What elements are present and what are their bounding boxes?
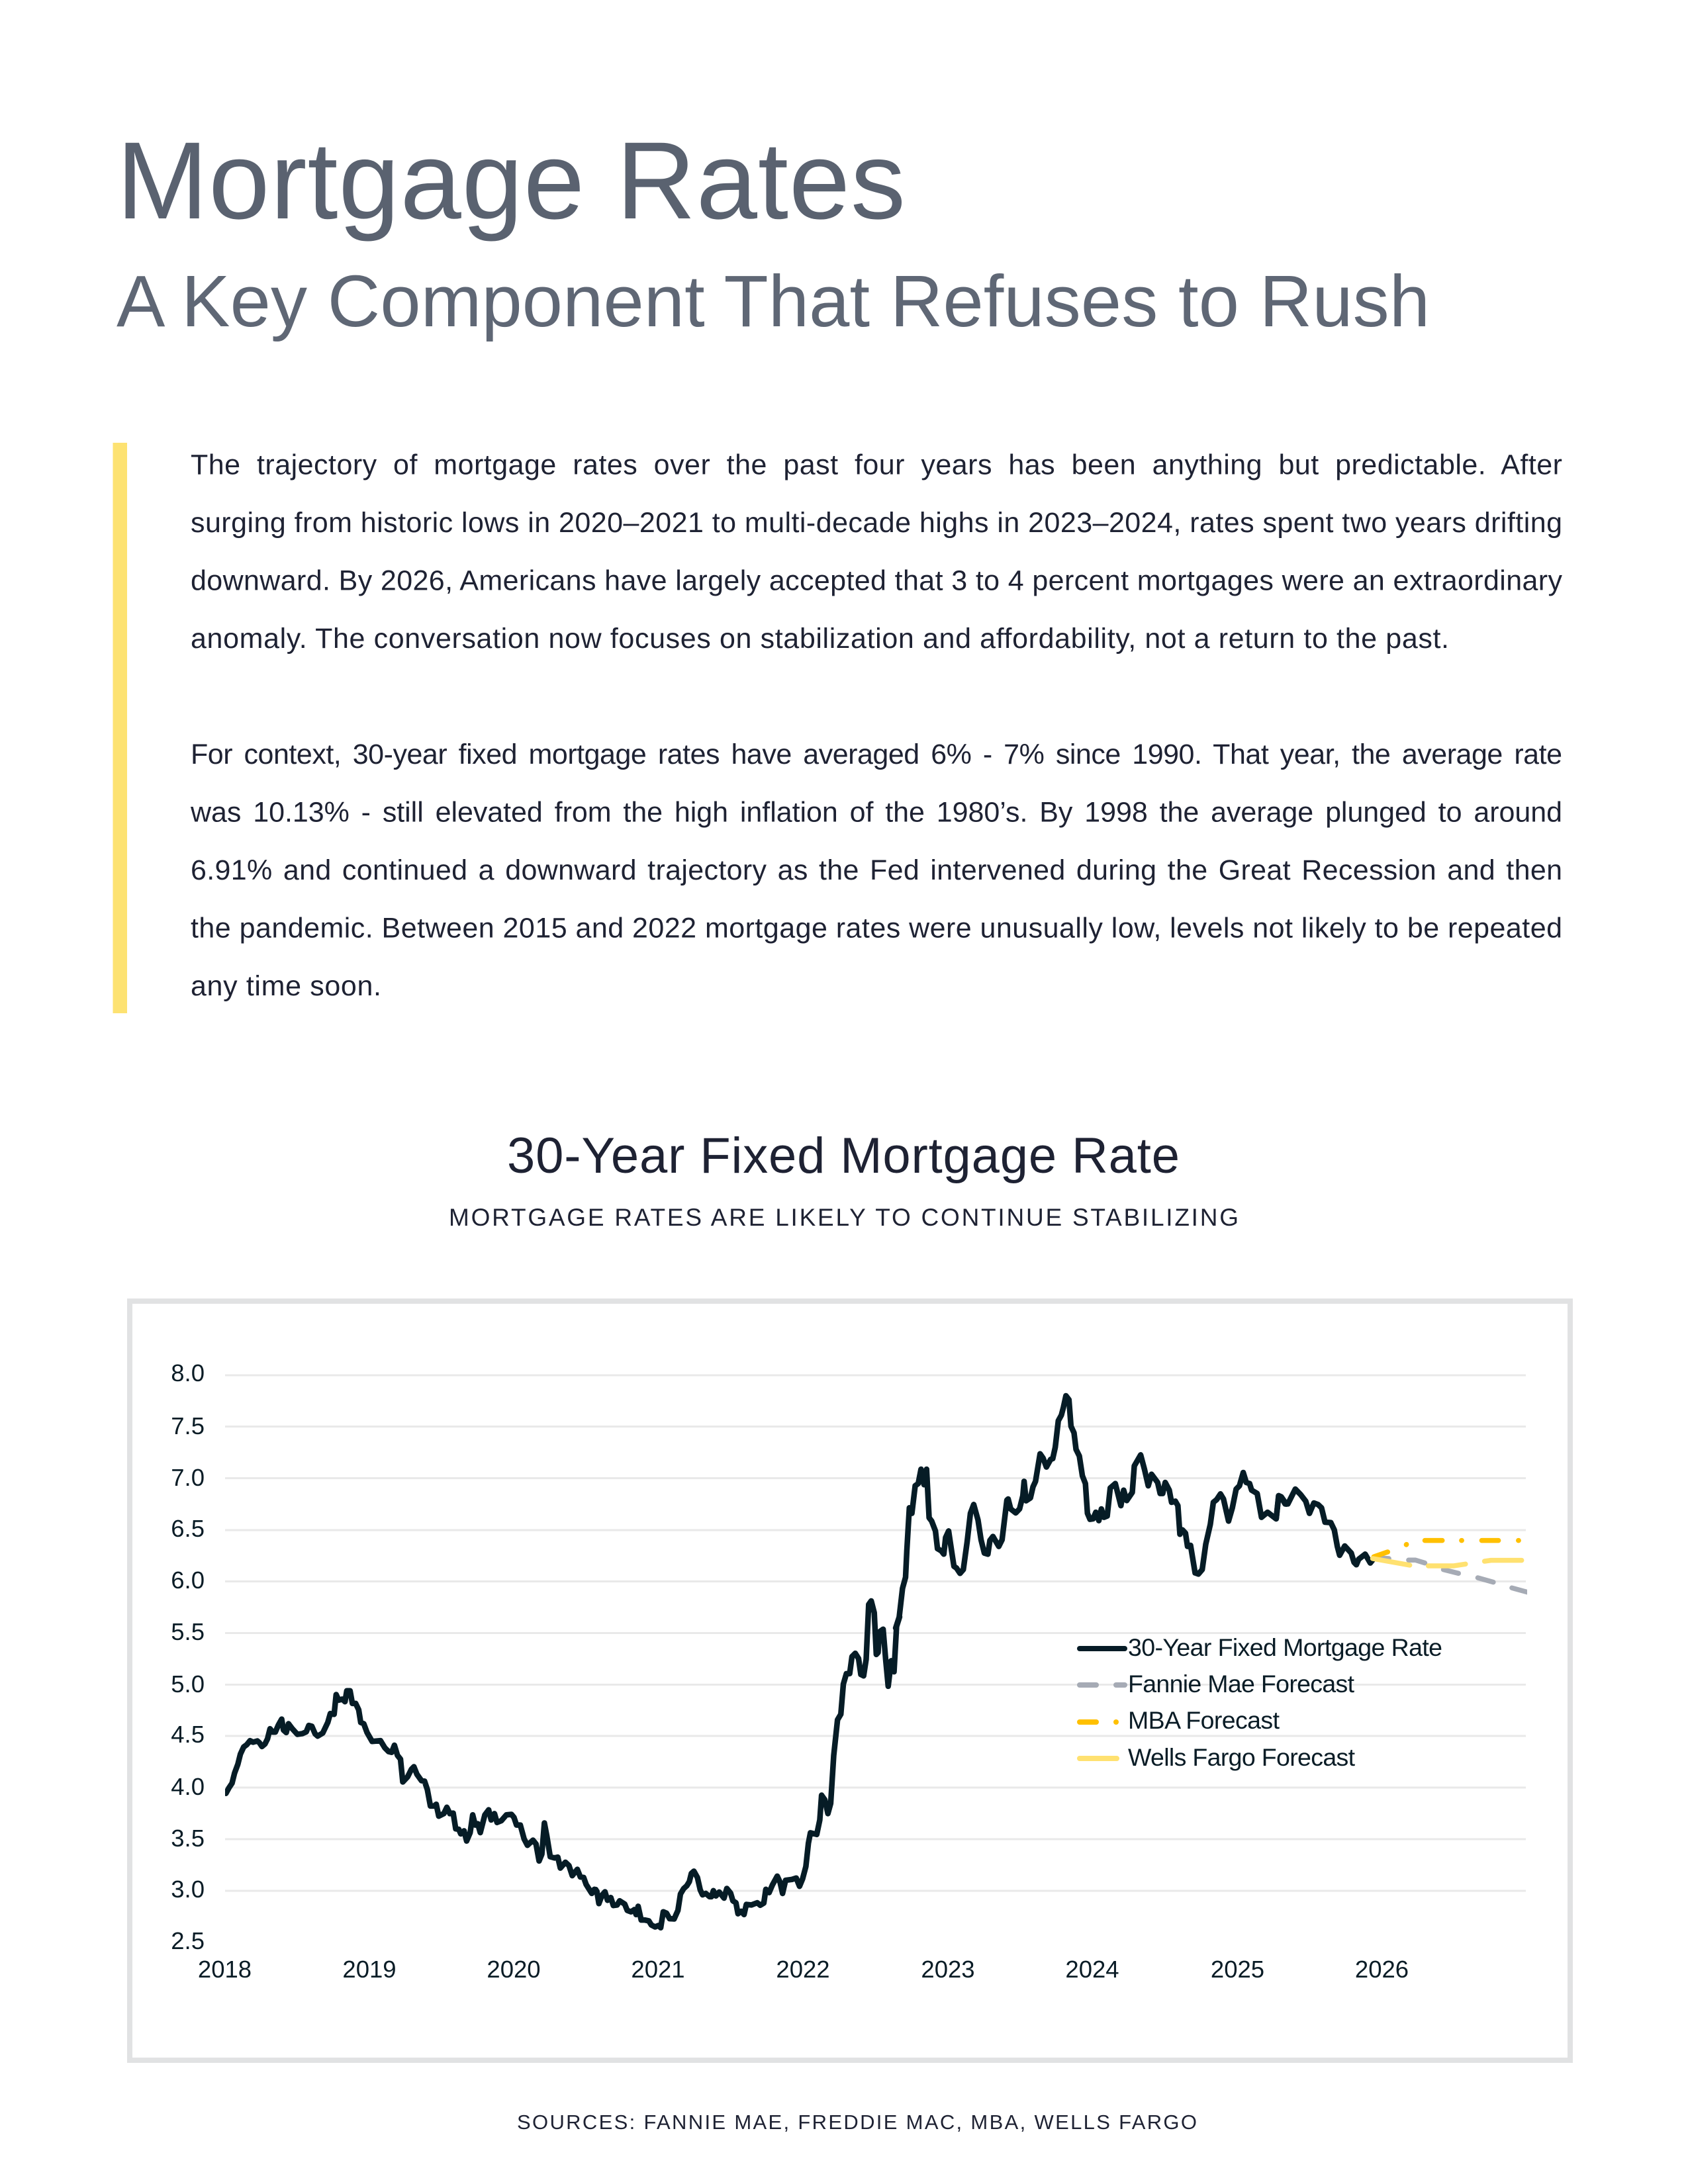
y-axis labels: 7.5	[171, 1412, 205, 1439]
line: Fannie Mae forecast	[1374, 1557, 1530, 1593]
x-axis labels: 2019	[342, 1956, 397, 1983]
y-axis labels: 3.0	[171, 1876, 205, 1903]
x-axis labels	[198, 1956, 1409, 1983]
legend: 30-year fixed mortgage rate: 30-Year Fixed Mortgage Rate	[1128, 1633, 1442, 1661]
yellow accent bar	[113, 443, 127, 1013]
y-axis labels	[171, 1359, 205, 1954]
y-axis labels: 3.5	[171, 1825, 205, 1852]
legend: Wells Fargo forecast: Wells Fargo Forecast	[1128, 1743, 1356, 1771]
paragraph 2: the pandemic. Between 2015 and 2022 mortgage rates were unusually low, levels not likely to be repeated	[191, 912, 1562, 944]
paragraph 2: any time soon.	[191, 970, 381, 1002]
line: MBA forecast	[1374, 1541, 1519, 1557]
y-axis labels: 7.0	[171, 1464, 205, 1491]
chart frame	[130, 1301, 1570, 2060]
paragraph 1: downward. By 2026, Americans have largely accepted that 3 to 4 percent mortgages were an extraordinary	[191, 565, 1562, 597]
chart panel	[130, 1301, 1570, 2060]
y-axis labels: 2.5	[171, 1927, 205, 1954]
y-axis labels: 5.0	[171, 1670, 205, 1698]
y-axis labels: 5.5	[171, 1618, 205, 1645]
body text block	[190, 449, 1562, 1002]
forecast lines	[1373, 1541, 1530, 1593]
paragraph 1: surging from historic lows in 2020–2021 to multi-decade highs in 2023–2024, rates spent two years drifting	[191, 507, 1562, 539]
y-axis labels: 4.5	[171, 1721, 205, 1748]
chart subtitle: MORTGAGE RATES ARE LIKELY TO CONTINUE STABILIZING	[449, 1204, 1239, 1231]
paragraph 2	[190, 739, 1562, 1002]
paragraph 2: was 10.13% - still elevated from the high inflation of the 1980’s. By 1998 the average plunged to around	[190, 797, 1562, 829]
x-axis labels: 2026	[1355, 1956, 1409, 1983]
line: Wells Fargo forecast	[1373, 1559, 1522, 1566]
paragraph 2: 6.91% and continued a downward trajectory as the Fed intervened during the Great Recession and then	[191, 854, 1562, 886]
paragraph 1	[191, 449, 1562, 655]
sources note: SOURCES: FANNIE MAE, FREDDIE MAC, MBA, WELLS FARGO	[517, 2111, 1197, 2134]
subtitle: A Key Component That Refuses to Rush	[117, 261, 1430, 342]
x-axis labels: 2025	[1211, 1956, 1264, 1983]
paragraph 1: The trajectory of mortgage rates over the past four years has been anything but predictable. After	[191, 449, 1562, 481]
x-axis labels: 2021	[631, 1956, 685, 1983]
line: 30-year fixed mortgage rate	[226, 1396, 1374, 1928]
legend: MBA forecast: MBA Forecast	[1128, 1706, 1280, 1734]
paragraph 2: For context, 30-year fixed mortgage rates have averaged 6% - 7% since 1990. That year, the average rate	[191, 739, 1562, 770]
x-axis labels: 2024	[1065, 1956, 1119, 1983]
y-axis labels: 4.0	[171, 1773, 205, 1800]
y-axis labels: 8.0	[171, 1359, 205, 1387]
x-axis labels: 2023	[921, 1956, 975, 1983]
chart title: 30-Year Fixed Mortgage Rate	[507, 1128, 1180, 1184]
legend: Fannie Mae forecast: Fannie Mae Forecast	[1128, 1670, 1355, 1698]
y-axis labels: 6.0	[171, 1567, 205, 1594]
title: Mortgage Rates	[117, 120, 906, 242]
x-axis labels: 2022	[776, 1956, 830, 1983]
paragraph 1: anomaly. The conversation now focuses on stabilization and affordability, not a return to the past.	[191, 623, 1449, 655]
x-axis labels: 2020	[487, 1956, 541, 1983]
x-axis labels: 2018	[198, 1956, 252, 1983]
legend	[1080, 1633, 1442, 1771]
y-axis labels: 6.5	[171, 1515, 205, 1542]
